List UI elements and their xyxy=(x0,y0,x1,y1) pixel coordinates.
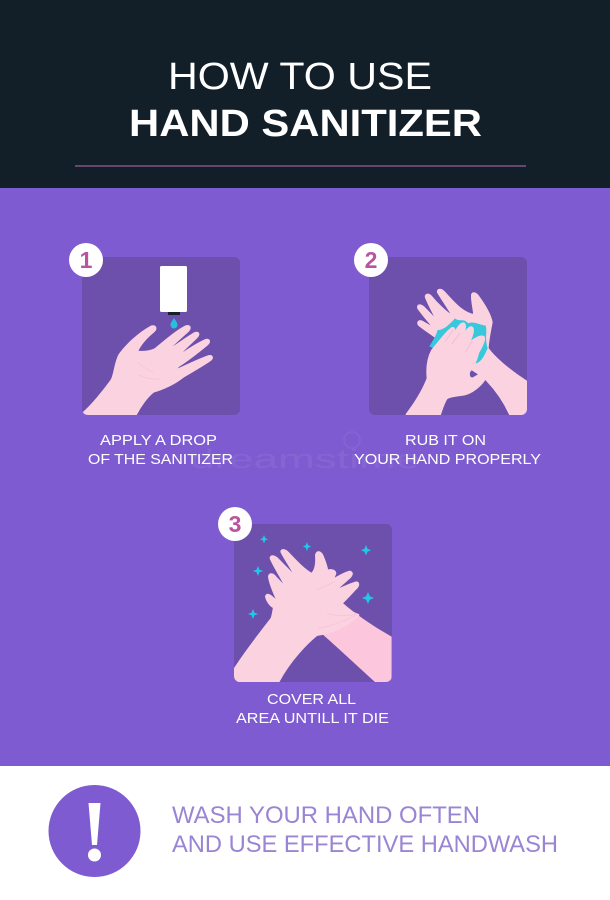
caption 3 xyxy=(236,692,389,727)
footer message xyxy=(172,802,558,858)
front hand xyxy=(407,323,487,414)
footer xyxy=(48,785,558,877)
back hand xyxy=(418,290,527,414)
icon: crossed hands xyxy=(233,550,392,682)
footer message: WASH YOUR HAND OFTEN xyxy=(172,802,480,829)
step 3 xyxy=(218,507,392,727)
main hands xyxy=(233,550,358,682)
title line 2: HAND SANITIZER xyxy=(129,103,482,145)
caption 2 xyxy=(354,433,541,468)
icon: open hand xyxy=(83,326,212,414)
badge 2 xyxy=(354,243,388,277)
icon: rubbing hands xyxy=(407,290,527,414)
right forearm xyxy=(323,603,392,682)
badge 1: 1 xyxy=(80,247,93,273)
caption 1 xyxy=(88,433,233,468)
step 1 xyxy=(69,243,240,468)
caption 3: COVER ALL xyxy=(267,692,356,708)
caption 2: YOUR HAND PROPERLY xyxy=(354,452,541,468)
badge 3: 3 xyxy=(229,511,241,537)
step 3 tile xyxy=(234,524,392,682)
caption 1: OF THE SANITIZER xyxy=(88,452,233,468)
badge 2: 2 xyxy=(365,247,377,273)
step 2 tile xyxy=(369,257,527,415)
gel xyxy=(429,318,488,363)
watermark: dreamstime xyxy=(190,444,420,474)
icon: sanitizer bottle xyxy=(160,266,187,328)
main purple panel xyxy=(0,188,610,766)
icon: sparkles xyxy=(248,535,374,619)
watermark xyxy=(190,432,420,474)
footer message: AND USE EFFECTIVE HANDWASH xyxy=(172,831,558,858)
icon: exclamation xyxy=(48,785,140,877)
step 2 xyxy=(354,243,541,468)
badge 3 xyxy=(218,507,252,541)
badge 1 xyxy=(69,243,103,277)
step 1 tile xyxy=(82,257,240,415)
caption 2: RUB IT ON xyxy=(405,433,486,449)
title line 1: HOW TO USE xyxy=(168,56,432,98)
header panel xyxy=(0,0,610,188)
caption 1: APPLY A DROP xyxy=(100,433,217,449)
caption 3: AREA UNTILL IT DIE xyxy=(236,711,389,727)
